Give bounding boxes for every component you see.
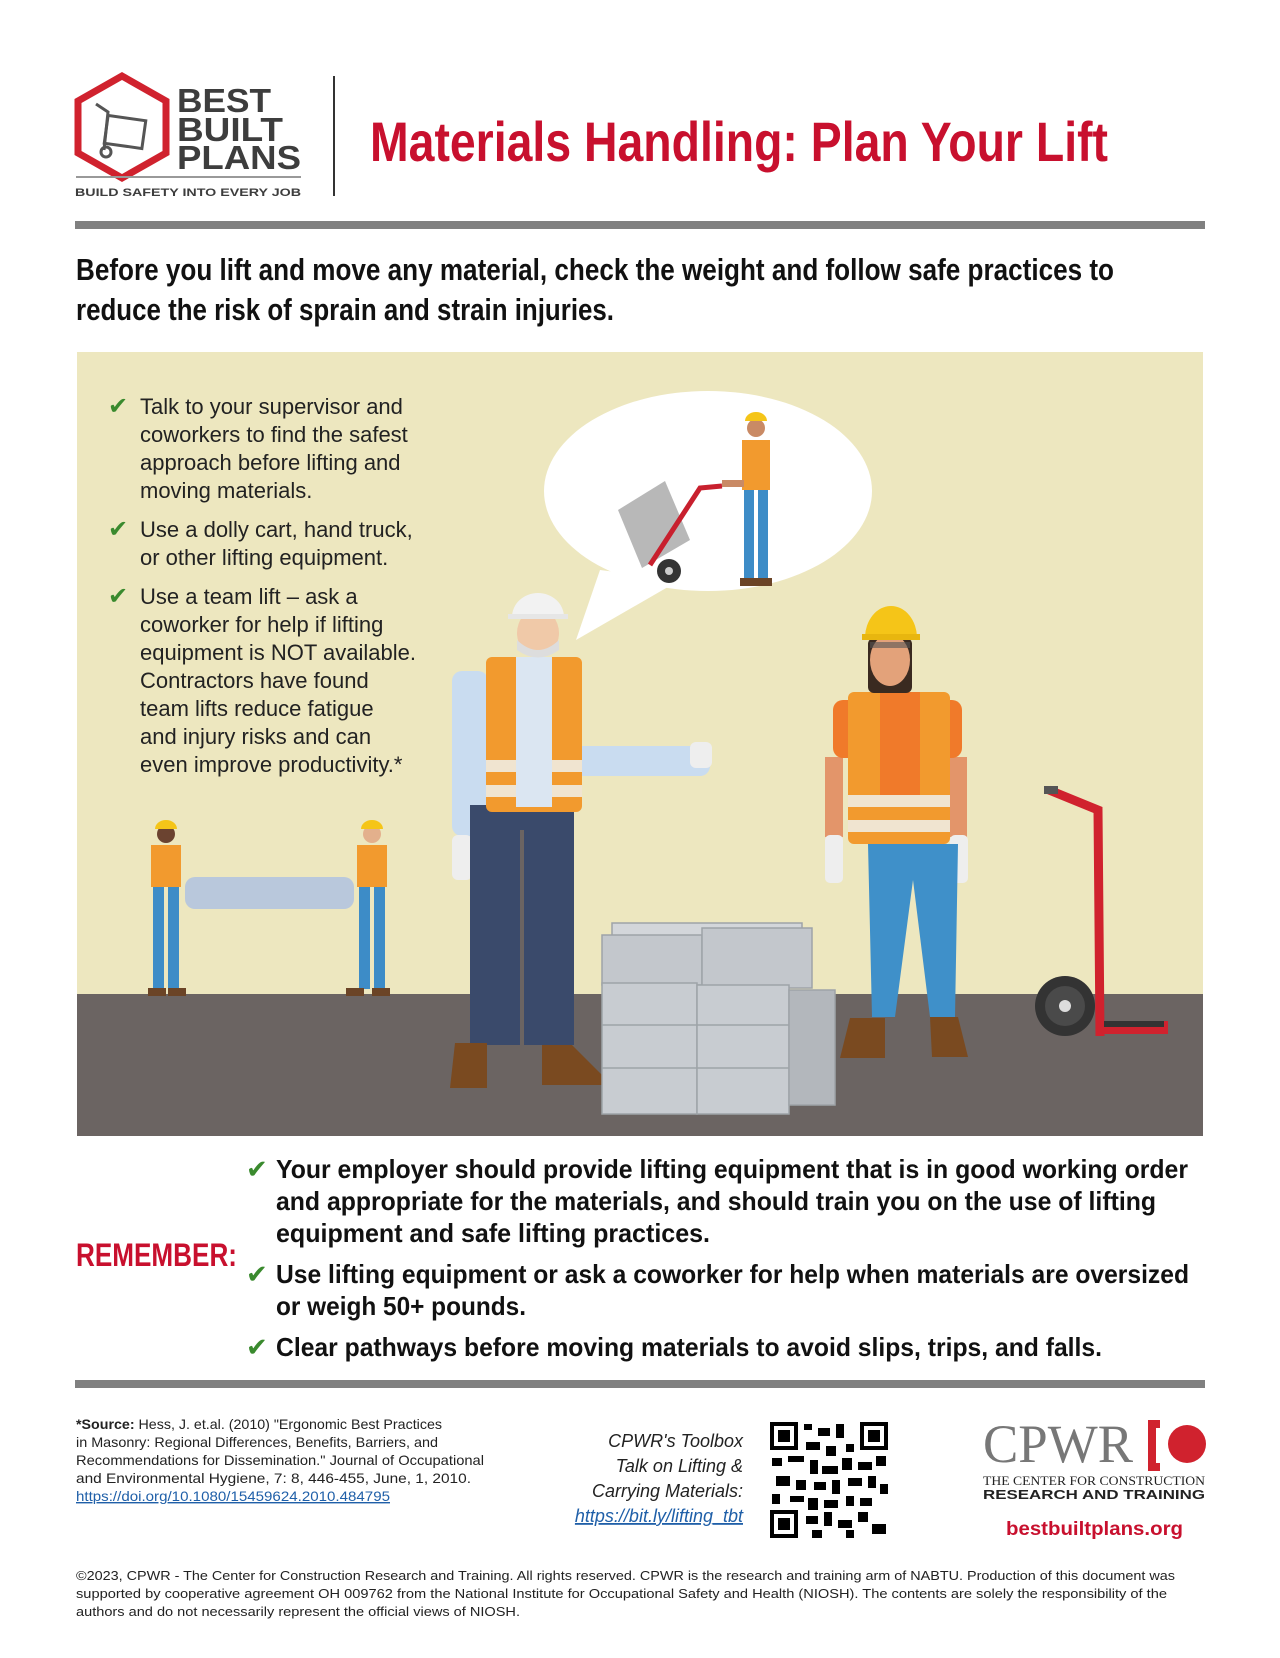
copyright: authors and do not necessarily represent the official views of NIOSH. [76, 1604, 520, 1619]
source citation: Recommendations for Dissemination." Journal of Occupational [76, 1452, 484, 1468]
source citation: in Masonry: Regional Differences, Benefits, Barriers, and [76, 1434, 438, 1450]
scene bullets: equipment is NOT available. [140, 640, 416, 665]
remember section: Your employer should provide lifting equipment that is in good working order [276, 1154, 1188, 1184]
remember section [76, 1154, 1189, 1362]
remember section: Clear pathways before moving materials to avoid slips, trips, and falls. [276, 1332, 1102, 1362]
speech bubble [544, 391, 872, 640]
scene bullets: Talk to your supervisor and [140, 394, 403, 419]
QR code [770, 1422, 888, 1538]
logo: Best Built Plans: BUILT [177, 111, 283, 148]
hand truck [1035, 786, 1168, 1036]
scene bullets: moving materials. [140, 478, 312, 503]
source citation: *Source: Hess, J. et.al. (2010) "Ergonomic Best Practices [76, 1416, 442, 1432]
scene bullets: ✔ [108, 583, 128, 610]
scene bullets: even improve productivity.* [140, 752, 403, 777]
scene bullets: coworker for help if lifting [140, 612, 383, 637]
intro text: Before you lift and move any material, check the weight and follow safe practices to [76, 252, 1114, 287]
copyright: supported by cooperative agreement OH 009762 from the National Institute for Occupational Safety and Health (NIOSH). The contents are solely the responsibility of the [76, 1586, 1167, 1601]
CPWR logo: RESEARCH AND TRAINING [983, 1487, 1205, 1502]
remember section: ✔ [246, 1259, 268, 1289]
remember section: Use lifting equipment or ask a coworker for help when materials are oversized [276, 1259, 1189, 1289]
toolbox talk link: CPWR's Toolbox [608, 1431, 744, 1451]
remember section: equipment and safe lifting practices. [276, 1218, 710, 1248]
scene bullets: approach before lifting and [140, 450, 401, 475]
scene bullets [108, 393, 416, 777]
toolbox talk link: Carrying Materials: [592, 1481, 743, 1501]
logo: Best Built Plans [75, 76, 301, 199]
logo: Best Built Plans: BEST [177, 82, 271, 119]
scene bullets: or other lifting equipment. [140, 545, 388, 570]
woman standing [825, 606, 968, 1058]
scene bullets: and injury risks and can [140, 724, 371, 749]
scene bullets: team lifts reduce fatigue [140, 696, 374, 721]
scene bullets: ✔ [108, 516, 128, 543]
toolbox talk link [575, 1431, 744, 1526]
scene bullets: Contractors have found [140, 668, 369, 693]
remember section: ✔ [246, 1332, 268, 1362]
copyright: ©2023, CPWR - The Center for Construction Research and Training. All rights reserved. CPWR is the research and training arm of NABTU. Production of this document was [76, 1568, 1176, 1583]
source citation: https://doi.org/10.1080/15459624.2010.484795 [76, 1488, 390, 1504]
intro text [76, 252, 1114, 327]
CPWR logo [983, 1414, 1206, 1540]
source citation [76, 1416, 484, 1504]
remember section: and appropriate for the materials, and should train you on the use of lifting [276, 1186, 1156, 1216]
title: Materials Handling: Plan Your Lift [370, 110, 1108, 173]
source citation: and Environmental Hygiene, 7: 8, 446-455, June, 1, 2010. [76, 1470, 471, 1486]
CPWR logo: bestbuiltplans.org [1006, 1519, 1183, 1540]
logo: Best Built Plans: PLANS [177, 139, 301, 176]
intro text: reduce the risk of sprain and strain injuries. [76, 292, 614, 327]
remember section: ✔ [246, 1154, 268, 1184]
toolbox talk link: Talk on Lifting & [616, 1456, 743, 1476]
copyright [76, 1568, 1176, 1619]
man pointing [450, 593, 712, 1088]
remember section: REMEMBER: [76, 1237, 237, 1273]
panel: illustration scene [77, 352, 1203, 1136]
CPWR logo: THE CENTER FOR CONSTRUCTION [983, 1473, 1206, 1488]
CPWR logo: CPWR [983, 1414, 1133, 1474]
scene bullets: ✔ [108, 393, 128, 420]
toolbox talk link: https://bit.ly/lifting_tbt [575, 1506, 744, 1526]
remember section: or weigh 50+ pounds. [276, 1291, 526, 1321]
scene bullets: Use a team lift – ask a [140, 584, 358, 609]
scene bullets: coworkers to find the safest [140, 422, 408, 447]
scene bullets: Use a dolly cart, hand truck, [140, 517, 413, 542]
team lift workers [148, 820, 390, 996]
logo: Best Built Plans: BUILD SAFETY INTO EVERY JOB [75, 187, 301, 199]
concrete blocks [602, 923, 835, 1114]
